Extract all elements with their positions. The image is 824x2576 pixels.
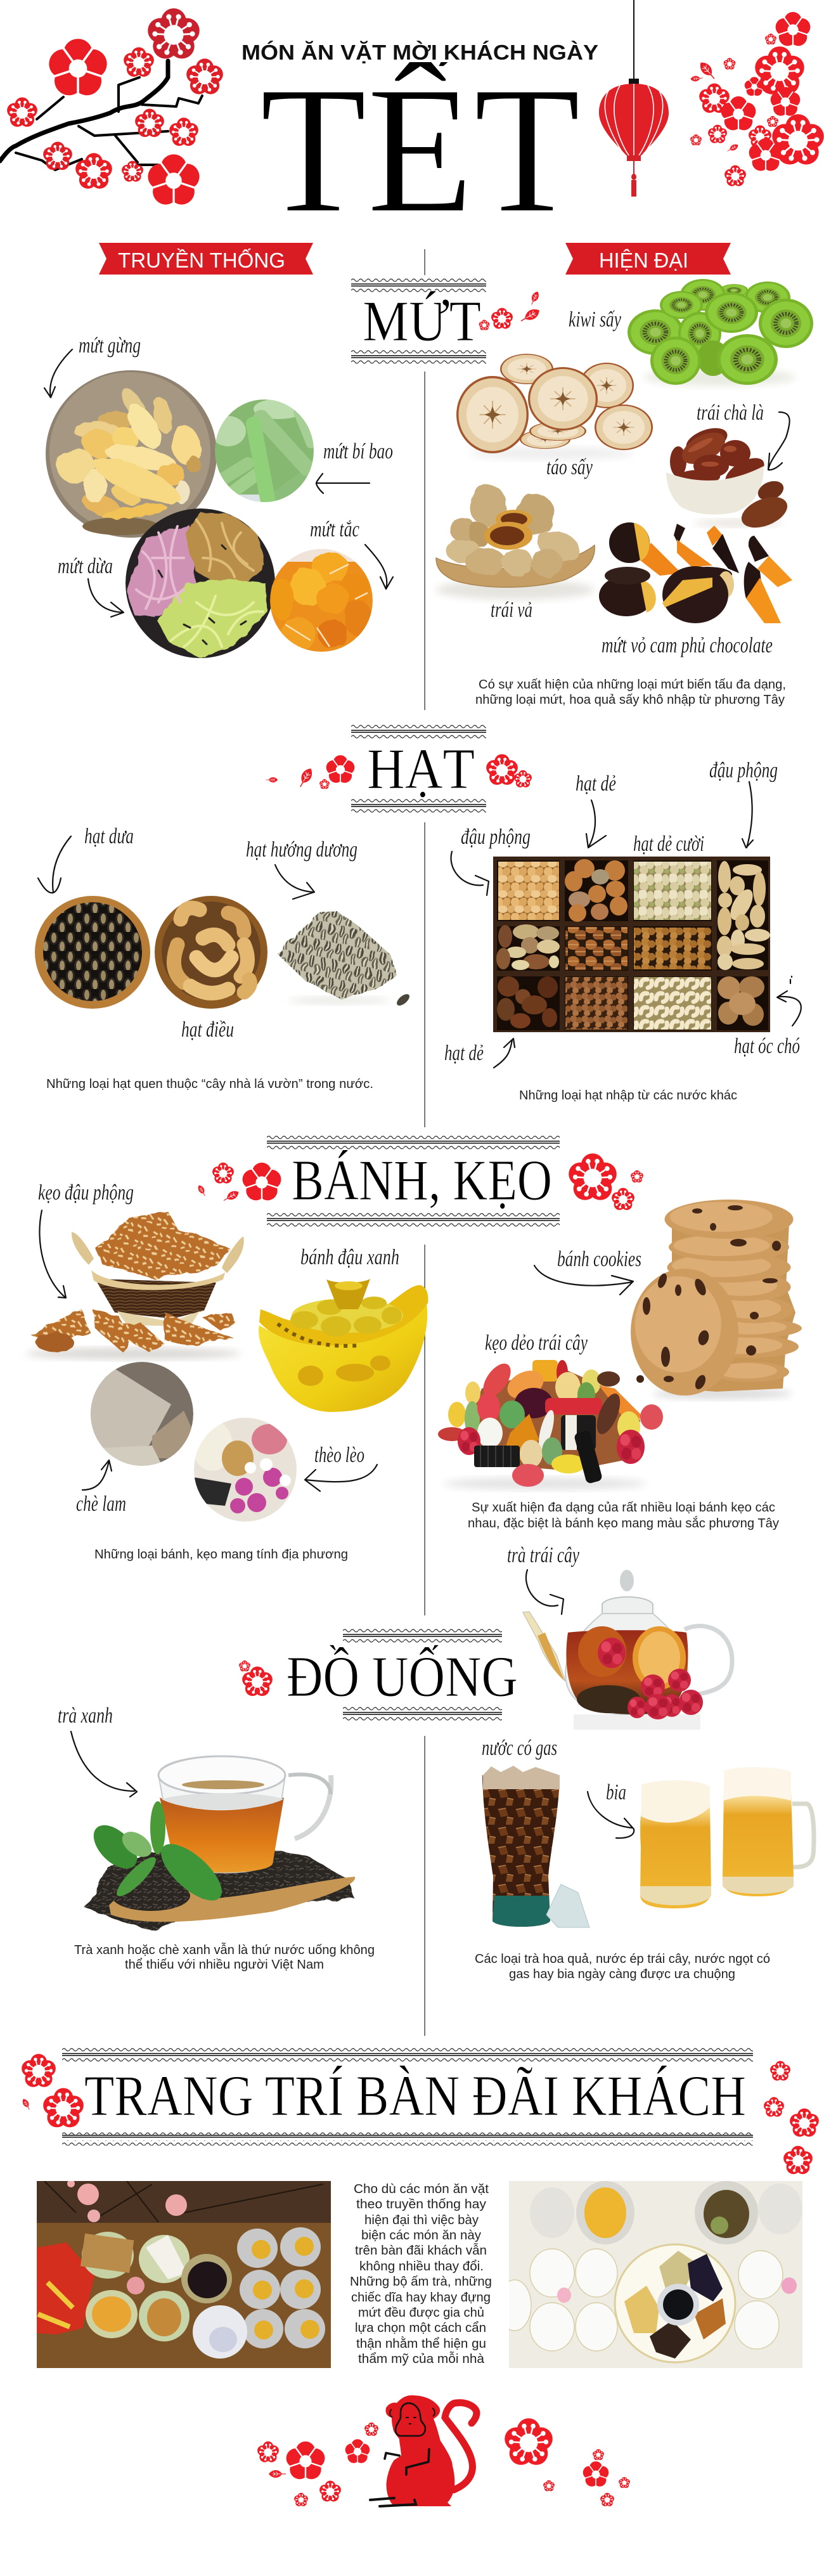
label: chè lam: chè lam	[76, 1491, 126, 1516]
image: kẹo đậu phộng	[25, 1212, 244, 1359]
heading: HẠT: HẠT	[367, 737, 475, 801]
image: táo sấy	[456, 354, 653, 460]
title: TẾT	[260, 48, 581, 251]
heading: BÁNH, KẸO: BÁNH, KẸO	[292, 1148, 552, 1212]
text: hạt nhập khẩu: Những loại hạt nhập từ các nước khác	[519, 1089, 737, 1103]
photo: bàn đãi khách hiện đại	[498, 2181, 802, 2368]
text: trang trí: biện các món ăn này	[361, 2229, 481, 2243]
text: mứt hiện đại: Có sự xuất hiện của những loại mứt biến tấu đa dạng,	[479, 678, 786, 692]
label: mứt bí bao: mứt bí bao	[323, 439, 393, 463]
text: trang trí	[350, 2182, 492, 2366]
image: hạt hướng dương	[278, 910, 411, 1007]
image: trái chà là	[666, 423, 792, 534]
text: bánh kẹo địa phương: Những loại bánh, kẹo mang tính địa phương	[94, 1548, 348, 1562]
image: thèo lèo	[192, 1418, 297, 1522]
text: trang trí: theo truyền thống hay	[356, 2197, 486, 2211]
label: hạt óc chó: hạt óc chó	[734, 1033, 800, 1058]
arrow: kẹo đậu phộng	[39, 1210, 66, 1298]
label: kẹo đậu phộng: kẹo đậu phộng	[38, 1180, 134, 1205]
image: mứt dừa	[126, 508, 275, 658]
panel: trang trí bàn đãi khách	[21, 2047, 819, 2506]
text: trà xanh	[74, 1943, 375, 1972]
label: kiwi sấy: kiwi sấy	[569, 307, 621, 332]
icon: flowers	[21, 2054, 819, 2174]
icon: flowers	[196, 1153, 643, 1210]
label: đậu phộng trái: đậu phộng	[461, 824, 531, 849]
label: đậu phộng phải: đậu phộng	[709, 758, 778, 782]
text: trang trí: thận nhằm thể hiện gu	[356, 2336, 486, 2351]
ribbon: HIỆN ĐẠI: HIỆN ĐẠI	[599, 249, 688, 272]
label: hạt dẻ cười: hạt dẻ cười	[633, 831, 704, 856]
image: hạt dưa	[35, 896, 150, 1009]
label: hạt dẻ dưới: hạt dẻ	[444, 1040, 484, 1065]
label: trà xanh: trà xanh	[58, 1703, 113, 1728]
label: nước có gas: nước có gas	[482, 1735, 557, 1760]
image: hộp hạt nhập khẩu	[493, 857, 770, 1032]
label: mứt dừa: mứt dừa	[58, 553, 113, 578]
arrow: hạt dẻ trên	[586, 800, 606, 848]
image: trái vả	[436, 484, 595, 600]
image: bánh cookies	[631, 1200, 802, 1399]
text: bánh kẹo hiện đại	[468, 1501, 779, 1531]
image: mứt gừng	[46, 370, 217, 538]
icon: flowers	[266, 754, 532, 789]
label: hạt điều: hạt điều	[181, 1017, 234, 1042]
label: hạt hướng dương: hạt hướng dương	[246, 837, 357, 862]
image: bia	[640, 1767, 814, 1908]
branch with blossoms	[0, 8, 223, 209]
photo: bàn đãi khách truyền thống	[37, 2180, 331, 2368]
label: bánh đậu xanh: bánh đậu xanh	[300, 1245, 399, 1269]
text: trang trí: hiện đại thì việc bày	[364, 2213, 479, 2227]
subtitle: MÓN ĂN VẶT MỜI KHÁCH NGÀY	[241, 41, 598, 64]
text: trang trí: Cho dù các món ăn vặt	[354, 2182, 489, 2196]
ribbon: TRUYỀN THỐNG: TRUYỀN THỐNG	[118, 248, 285, 272]
image: nước có gas	[482, 1766, 589, 1927]
arrow: mứt dừa	[88, 579, 124, 617]
arrow: mứt gừng	[44, 349, 72, 398]
label: thèo lèo: thèo lèo	[314, 1442, 364, 1467]
image: trà trái cây	[523, 1570, 732, 1730]
heading: MỨT: MỨT	[363, 289, 481, 353]
label: trái chà là: trái chà là	[697, 400, 764, 425]
ribbon: TRUYỀN THỐNG	[99, 243, 313, 275]
arrow: bánh cookies	[534, 1265, 633, 1295]
text: mứt hiện đại	[475, 678, 786, 707]
arrow: hạt dẻ dưới	[494, 1039, 515, 1068]
arrow: hạt dưa	[38, 836, 71, 893]
text: trang trí: lựa chọn một cách cẩn	[355, 2321, 486, 2335]
arrow: chè lam	[82, 1460, 112, 1490]
label: kẹo dẻo trái cây: kẹo dẻo trái cây	[485, 1330, 588, 1355]
text: trang trí: mứt đều được gia chủ	[358, 2306, 484, 2320]
label: trà trái cây: trà trái cây	[507, 1543, 579, 1567]
label: táo sấy: táo sấy	[546, 455, 593, 479]
image: hạt điều	[155, 896, 267, 1009]
arrow: thèo lèo	[305, 1465, 377, 1491]
arrow: mứt tắc	[365, 545, 393, 589]
icon: flowers	[479, 290, 542, 330]
illustration: monkey and blossoms	[257, 2395, 630, 2506]
text: trang trí: Những bộ ấm trà, những	[350, 2275, 492, 2289]
text: đồ uống hiện đại: Các loại trà hoa quả, nước ép trái cây, nước ngọt có	[475, 1952, 770, 1966]
icon: lantern	[599, 0, 669, 197]
arrow: bia	[588, 1792, 634, 1838]
image: kiwi sấy	[628, 279, 813, 386]
heading: ĐỒ UỐNG: ĐỒ UỐNG	[286, 1645, 518, 1709]
image: chè lam	[91, 1362, 193, 1466]
ribbon: HIỆN ĐẠI	[565, 243, 731, 275]
text: đồ uống hiện đại	[475, 1952, 770, 1981]
image: trà xanh	[86, 1756, 355, 1931]
panel: hạt	[35, 724, 801, 1103]
arrow: trái chà là	[768, 412, 790, 470]
label: mứt tắc: mứt tắc	[310, 517, 359, 541]
text: trang trí: thẩm mỹ của mỗi nhà	[358, 2352, 485, 2366]
text: trà xanh: Trà xanh hoặc chè xanh vẫn là thứ nước uống không	[74, 1943, 375, 1957]
label: trái vả: trái vả	[491, 597, 532, 622]
icon: flowers	[239, 1660, 273, 1696]
arrow: trà xanh	[71, 1731, 137, 1797]
arrow: hạt óc chó	[777, 976, 801, 1026]
image: kẹo dẻo trái cây	[438, 1359, 663, 1490]
text: trang trí: chiếc dĩa hay khay đựng	[351, 2291, 491, 2305]
arrow: đậu phộng phải	[742, 782, 753, 848]
text: hạt trong nước: Những loại hạt quen thuộc “cây nhà lá vườn” trong nước.	[46, 1077, 373, 1091]
image: mứt tắc	[270, 549, 373, 652]
arrow: hạt hướng dương	[275, 865, 314, 899]
label: hạt dẻ trên: hạt dẻ	[576, 771, 616, 796]
text: bánh kẹo hiện đại: Sự xuất hiện đa dạng của rất nhiều loại bánh kẹo các	[472, 1501, 775, 1515]
label: bia: bia	[606, 1780, 626, 1804]
text: trang trí: trên bàn đãi khách vẫn	[355, 2243, 487, 2258]
text: bánh kẹo hiện đại: nhau, đặc biệt là bánh kẹo mang màu sắc phương Tây	[468, 1516, 779, 1531]
image: mứt bí bao	[215, 399, 314, 502]
text: đồ uống hiện đại: gas hay bia ngày càng được ưa chuộng	[509, 1967, 735, 1981]
label: hạt dưa: hạt dưa	[84, 824, 134, 848]
label: bánh cookies: bánh cookies	[557, 1246, 641, 1271]
arrow: đậu phộng trái	[451, 851, 489, 895]
text: mứt hiện đại: những loại mứt, hoa quả sấy khô nhập từ phương Tây	[475, 693, 785, 707]
label: mứt gừng: mứt gừng	[79, 333, 141, 358]
image: bánh đậu xanh	[259, 1279, 428, 1412]
arrow: mứt bí bao	[316, 474, 370, 493]
image: mứt vỏ cam phủ chocolate	[599, 522, 792, 623]
panel: bánh kẹo	[25, 1135, 802, 1562]
right blossoms	[690, 12, 824, 186]
panel: đồ uống	[58, 1543, 814, 1981]
arrow: trà trái cây	[526, 1570, 563, 1614]
text: trang trí: không nhiều thay đổi.	[359, 2260, 484, 2274]
text: trà xanh: thể thiếu với nhiều người Việt Nam	[125, 1958, 324, 1972]
panel: mứt	[44, 278, 813, 707]
